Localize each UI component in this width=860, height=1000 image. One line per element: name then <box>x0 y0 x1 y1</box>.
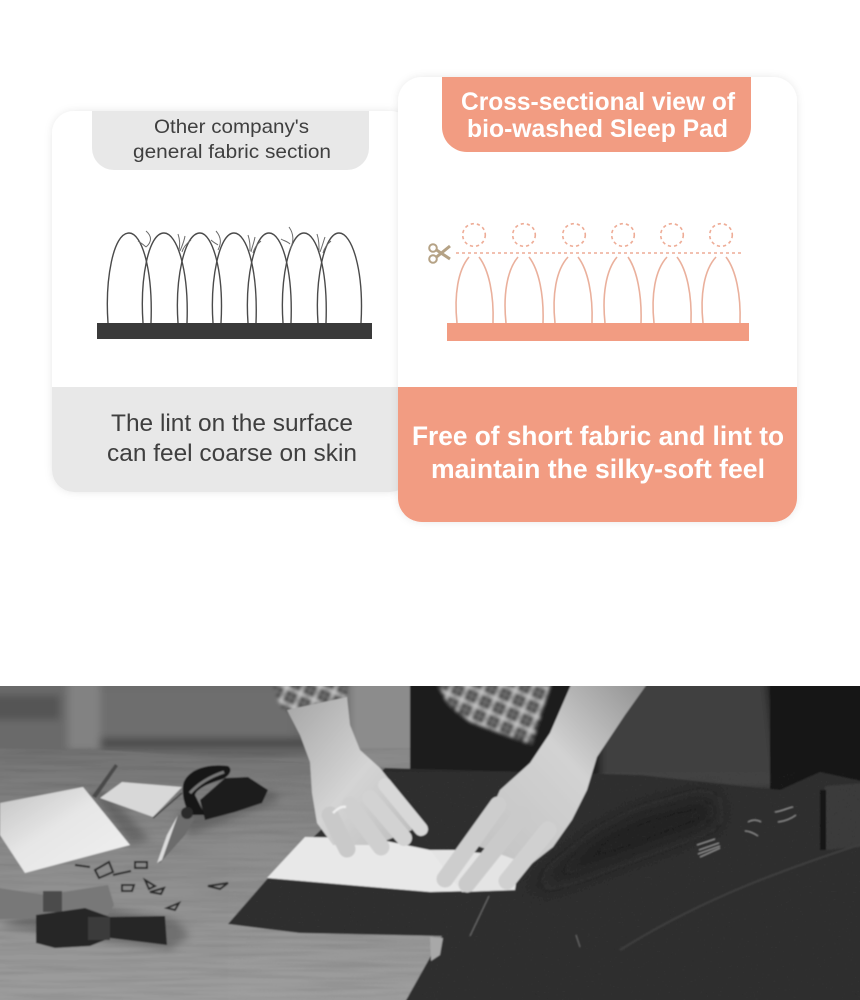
heading: other company's general fabric section: Other company's <box>154 116 309 138</box>
dark fabric on table <box>228 768 860 1000</box>
heading: cross-sectional view of bio-washed sleep pad: Cross-sectional view of <box>461 88 736 116</box>
soft table shadows <box>0 790 280 950</box>
panel: bio-washed sleep pad <box>398 77 797 522</box>
panel footer: grey band <box>52 387 412 492</box>
table top <box>0 748 440 1000</box>
icon: scissors <box>429 244 450 263</box>
diagram: fabric with lint <box>97 227 372 339</box>
table patch showing between fabric <box>430 937 443 961</box>
heading: cross-sectional view of bio-washed sleep pad <box>461 88 736 143</box>
sleep pad base bar <box>447 323 749 341</box>
caption: lint feels coarse: can feel coarse on skin <box>107 440 357 467</box>
papers on table <box>0 764 182 873</box>
caption: free of short fabric and lint: maintain the silky-soft feel <box>431 454 765 484</box>
heading tab: cross-sectional view <box>442 77 751 152</box>
panel: other company's fabric <box>52 111 412 492</box>
right hand and arm <box>445 680 650 884</box>
panel footer: coral band <box>398 387 797 522</box>
fabric base bar <box>97 323 372 339</box>
chalk marks and fabric fold <box>470 807 860 950</box>
dark torso background <box>409 686 772 790</box>
caption: lint feels coarse: The lint on the surface <box>111 410 353 437</box>
diagram: trimmed fabric <box>429 224 749 341</box>
left hand <box>287 697 421 849</box>
heading: other company's general fabric section: general fabric section <box>133 141 331 163</box>
bow ties <box>0 885 167 948</box>
white paper under hands <box>266 836 462 894</box>
caption: free of short fabric and lint: Free of short fabric and lint to <box>412 421 784 451</box>
scissors on table <box>157 765 268 863</box>
caption: free of short fabric and lint <box>412 421 784 484</box>
blurred background <box>0 686 352 762</box>
heading tab: other company <box>92 111 369 170</box>
heading: other company's general fabric section <box>133 116 331 163</box>
photo: tailor cutting fabric on a table <box>0 670 860 1000</box>
plaid shirt <box>435 680 552 745</box>
heading: cross-sectional view of bio-washed sleep pad: bio-washed Sleep Pad <box>467 115 728 143</box>
metal clips <box>75 862 228 910</box>
caption: lint feels coarse <box>107 410 357 467</box>
wedding ring <box>333 807 346 813</box>
